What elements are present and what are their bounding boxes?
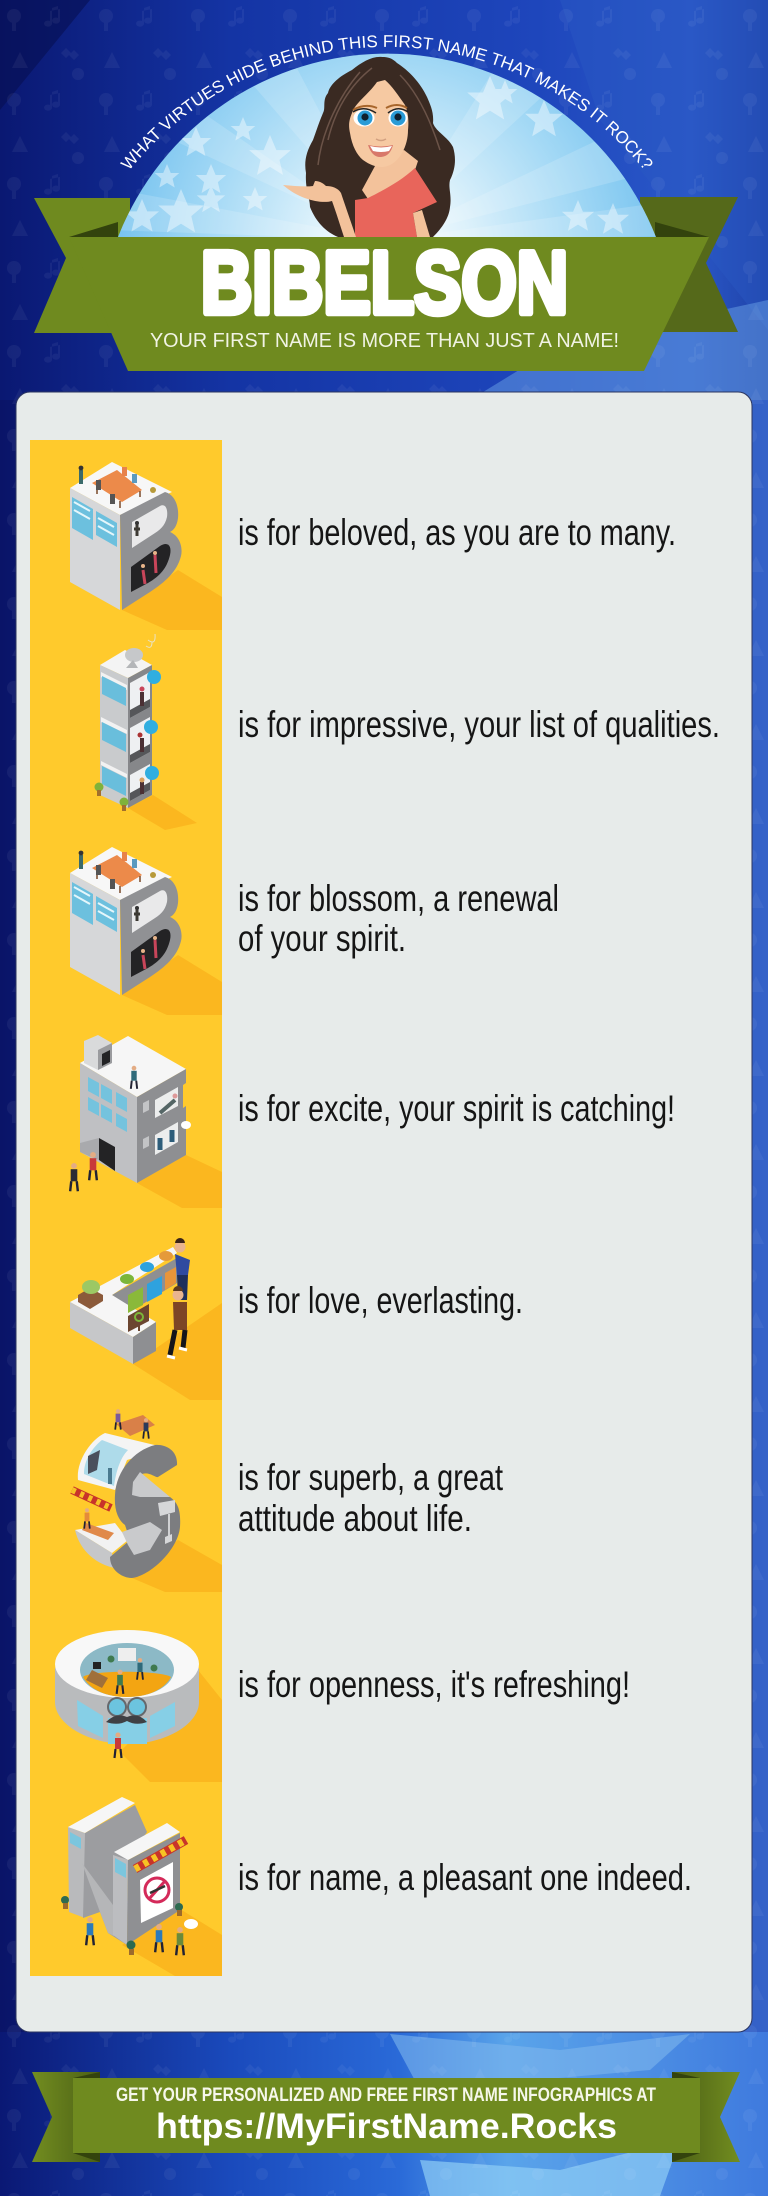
character: woman <box>283 57 455 237</box>
ribbon fold left <box>69 222 118 237</box>
icon: letter O building <box>55 1630 222 1782</box>
text: B2: is for blossom, a renewal <box>238 878 559 919</box>
main ribbon <box>69 237 709 371</box>
text: L: is for love, everlasting. <box>238 1280 523 1321</box>
text: S: attitude about life. <box>238 1498 472 1539</box>
panel background <box>16 392 752 2032</box>
name title: BIBELSON <box>201 233 568 332</box>
icon: letter B (blossom) <box>70 847 222 1015</box>
icon: letter I tower <box>94 634 197 830</box>
yellow column <box>30 440 222 1976</box>
icon: letter S building <box>72 1409 222 1592</box>
text: S: is for superb, a great <box>238 1457 504 1498</box>
icon: letter E building <box>70 1035 222 1208</box>
ribbon fold right <box>655 222 709 237</box>
ribbon tail right <box>640 197 738 332</box>
ribbon tail left <box>34 198 130 333</box>
text: B2: of your spirit. <box>238 918 406 959</box>
text: S <box>238 1457 504 1539</box>
footer ribbon <box>32 2072 740 2162</box>
text: O: is for openness, it's refreshing! <box>238 1664 630 1705</box>
text: B2 <box>238 878 559 959</box>
footer url: https://MyFirstName.Rocks <box>156 2107 617 2146</box>
icon: letter L recycling counter <box>70 1238 222 1400</box>
icon: letter N building <box>61 1797 222 1976</box>
footer line: GET YOUR PERSONALIZED AND FREE FIRST NAME INFOGRAPHICS AT <box>116 2085 656 2106</box>
sunburst dome <box>118 54 656 237</box>
icon: letter B (beloved) <box>70 462 222 630</box>
curved tagline: WHAT VIRTUES HIDE BEHIND THIS FIRST NAME THAT MAKES IT ROCK? <box>120 35 652 168</box>
subtitle: YOUR FIRST NAME IS MORE THAN JUST A NAME! <box>150 329 619 352</box>
